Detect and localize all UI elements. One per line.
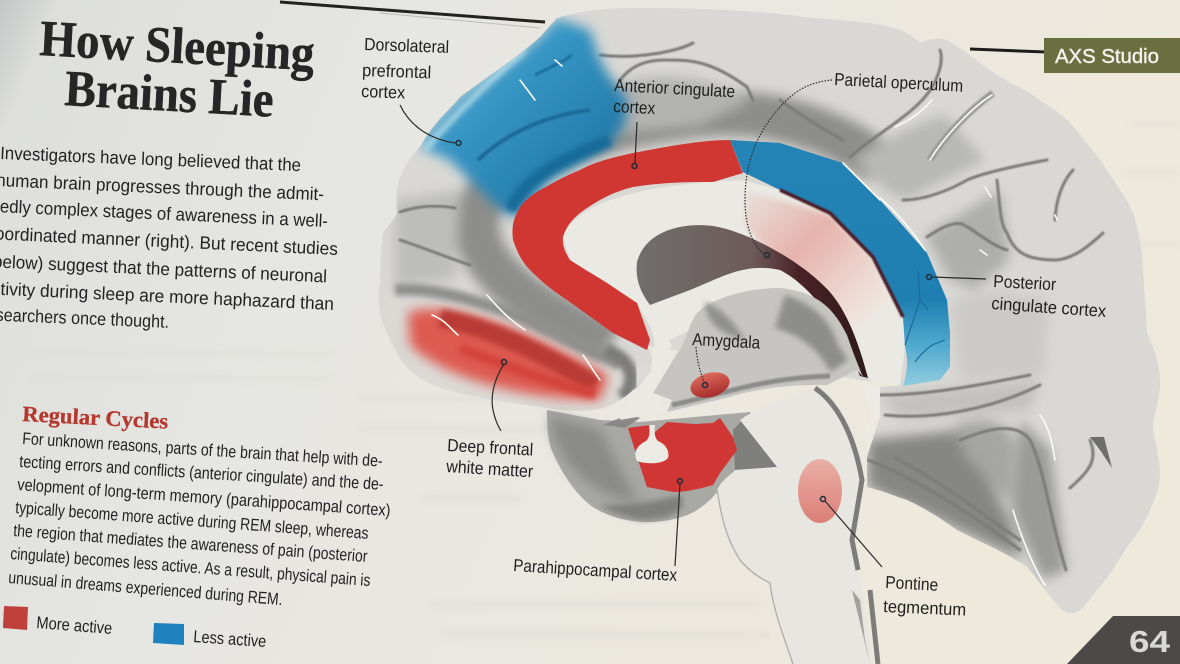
- intro paragraph: tedly complex stages of awareness in a well-: [0, 196, 328, 231]
- legend: [3, 606, 267, 651]
- body paragraph: unusual in dreams experienced during REM.: [8, 568, 283, 609]
- gyri grooves: [400, 43, 1112, 585]
- cerebrum: [370, 0, 1170, 640]
- parahippocampal red: [628, 418, 737, 492]
- label: parahippocampal cortex: Parahippocampal cortex: [513, 555, 678, 585]
- leader lines and dots: [400, 80, 986, 567]
- title: [38, 11, 316, 129]
- blue prefrontal zone: [420, 18, 628, 218]
- brain illustration: [370, 0, 1170, 664]
- legend: More active: [36, 613, 113, 638]
- fornix: [637, 225, 868, 378]
- temporal lobe: [547, 410, 777, 522]
- gray tonal zones: [395, 77, 1066, 580]
- label: anterior cingulate cortex: cortex: [613, 96, 656, 118]
- label: posterior cingulate cortex: cingulate cortex: [991, 293, 1107, 321]
- title: How Sleeping: [38, 11, 316, 82]
- label: dorsolateral prefrontal cortex: Dorsolateral: [364, 34, 450, 57]
- intro paragraph: human brain progresses through the admit-: [0, 170, 324, 204]
- body paragraph: velopment of long-term memory (parahippocampal cortex): [17, 475, 391, 520]
- white bean hole: [635, 425, 669, 463]
- label: pontine tegmentum: Pontine: [885, 572, 939, 595]
- body paragraph: For unknown reasons, parts of the brain that help with de-: [22, 429, 383, 471]
- amygdala spot: [688, 368, 732, 402]
- label: amygdala: Amygdala: [692, 329, 761, 353]
- heading: regular cycles: Regular Cycles: [22, 401, 169, 434]
- label: anterior cingulate cortex: [613, 75, 736, 118]
- title: Brains Lie: [63, 61, 275, 129]
- label: deep frontal white matter: Deep frontal: [447, 435, 534, 459]
- label: dorsolateral prefrontal cortex: [361, 34, 450, 103]
- frontal pale base for lower lobe: [549, 342, 600, 367]
- red deep frontal white matter: [408, 309, 608, 400]
- ghost show-through text: [30, 120, 1180, 639]
- page number: [1067, 616, 1180, 664]
- central structures: [653, 288, 863, 412]
- label: posterior cingulate cortex: Posterior: [993, 271, 1057, 294]
- pink posterior tint: [745, 190, 890, 330]
- top rule lines: [280, 2, 1046, 52]
- body paragraph: tecting errors and conflicts (anterior cingulate) and the de-: [19, 452, 384, 494]
- brainstem: [717, 388, 873, 664]
- paper gap: [620, 308, 672, 420]
- white matter interior: [563, 180, 905, 385]
- badge: AXS Studio: [1044, 38, 1180, 73]
- label: deep frontal white matter: [445, 435, 534, 481]
- label: dorsolateral prefrontal cortex: prefrontal: [362, 60, 432, 82]
- label: anterior cingulate cortex: Anterior cingulate: [614, 75, 736, 101]
- label: deep frontal white matter: white matter: [445, 456, 534, 481]
- intro paragraph: [0, 143, 338, 332]
- page number: 64: [1129, 624, 1171, 659]
- body paragraph: cingulate) becomes less active. As a result, physical pain is: [10, 544, 371, 590]
- band: posterior cingulate: [730, 140, 950, 386]
- legend: Less active: [193, 627, 267, 651]
- body paragraph: the region that mediates the awareness of pain (posterior: [13, 521, 368, 566]
- pontine tegmentum spot: [798, 459, 842, 523]
- label: pontine tegmentum: tegmentum: [883, 596, 967, 620]
- label: pontine tegmentum: [883, 572, 967, 620]
- label: parietal operculum: Parietal operculum: [834, 69, 964, 96]
- intro paragraph: Investigators have long believed that the: [0, 143, 301, 175]
- label: dorsolateral prefrontal cortex: cortex: [361, 81, 406, 103]
- band: anterior cingulate: [512, 140, 743, 350]
- highlight notch: [862, 382, 880, 450]
- badge: AXS Studio: AXS Studio: [1055, 46, 1159, 68]
- body paragraph: [8, 429, 391, 609]
- body paragraph: typically become more active during REM sleep, whereas: [15, 498, 369, 543]
- label: posterior cingulate cortex: [991, 271, 1107, 321]
